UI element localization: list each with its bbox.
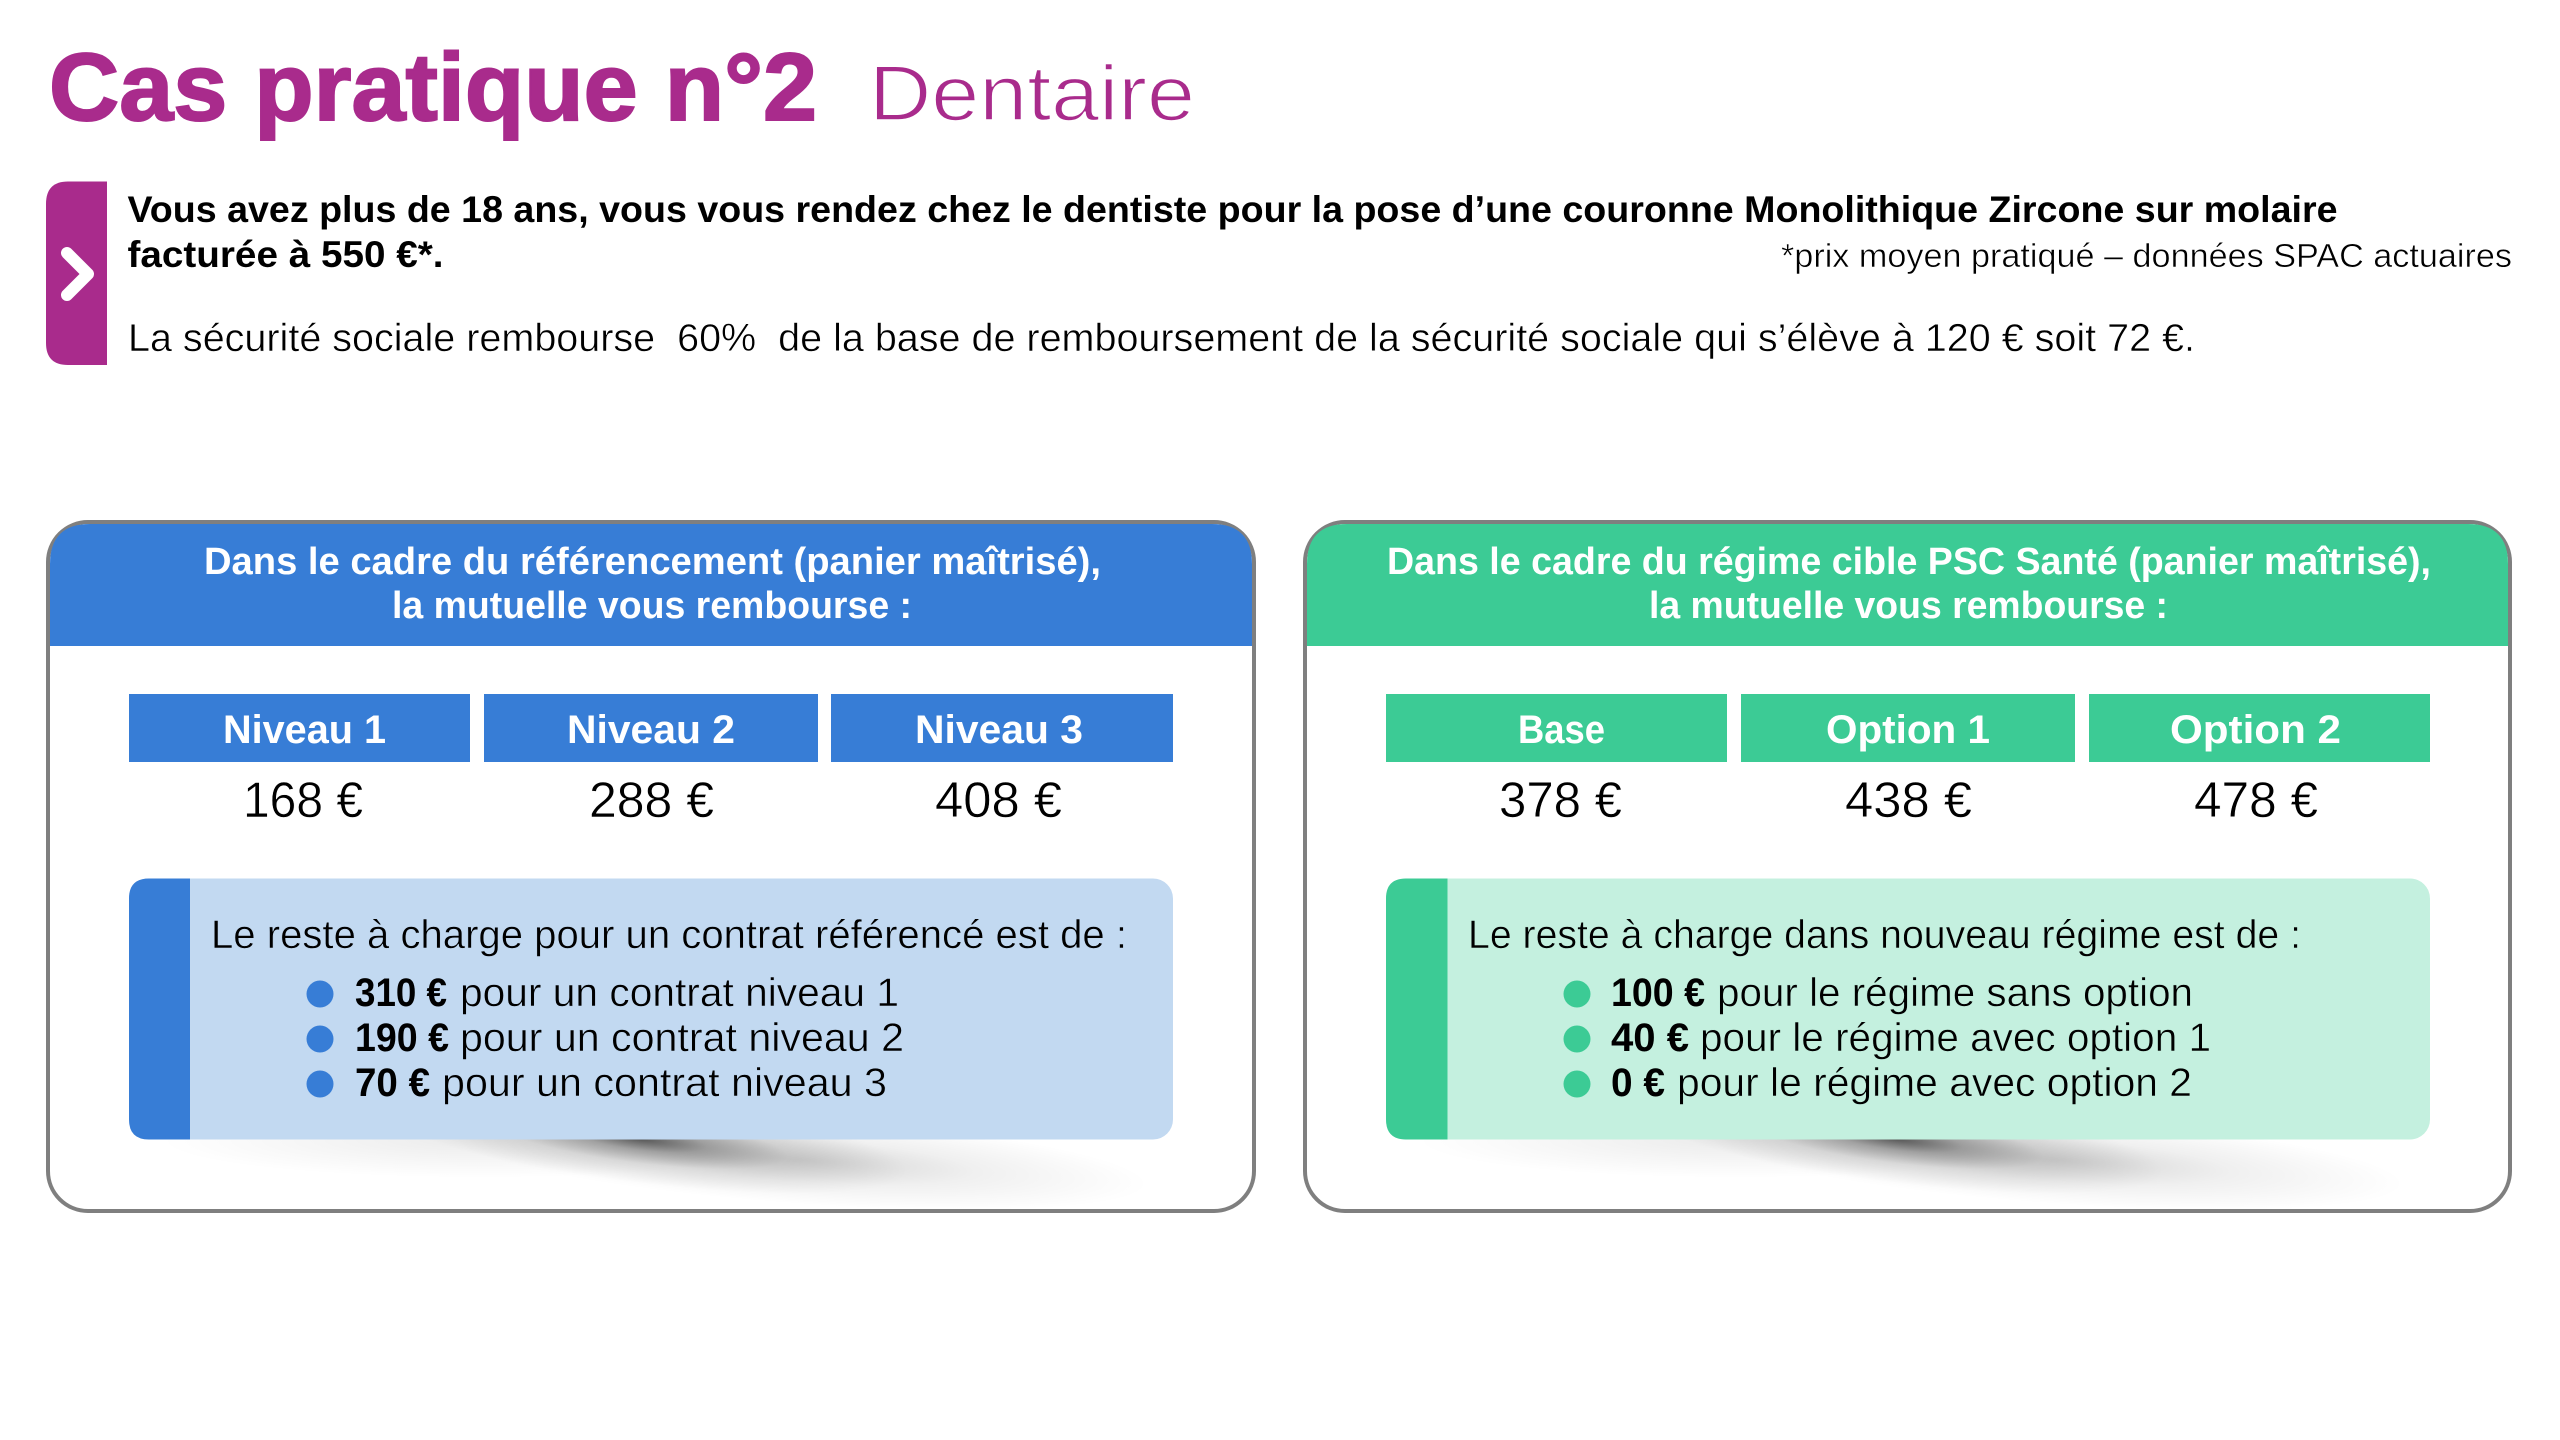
panel header: la mutuelle vous rembourse : <box>1649 585 2168 627</box>
callout: reste à charge <box>129 878 1173 1140</box>
column: Option 2: 478 € <box>2194 772 2318 828</box>
panel header <box>50 524 1252 646</box>
column: Niveau 1: 168 € <box>243 772 363 828</box>
title: Cas pratique n°2 <box>49 34 817 141</box>
bullet: sans option: pour le régime sans option <box>1717 971 2193 1015</box>
title: Dentaire <box>869 49 1195 137</box>
bullet: niveau 3: 70 € <box>355 1061 430 1105</box>
panel header <box>1307 524 2508 646</box>
text: scenario bold: facturée à 550 €*. <box>128 234 444 275</box>
column: Option 1: Option 1 <box>1826 708 1990 752</box>
column: Option 1 <box>1741 694 2075 828</box>
bullet: sans option: 100 € <box>1611 971 1705 1015</box>
bullet: option 2: pour le régime avec option 2 <box>1677 1061 2192 1105</box>
shadow under callout <box>1550 1140 2308 1196</box>
column: Niveau 1: Niveau 1 <box>223 708 386 752</box>
column: Niveau 1 <box>129 694 470 828</box>
panel: scenario intro <box>46 182 2512 365</box>
footnote: *prix moyen pratiqué – données SPAC actuaires <box>1781 237 2512 274</box>
bullet: option 1: 40 € <box>1611 1016 1689 1060</box>
column: Niveau 2 <box>484 694 818 828</box>
bullet: niveau 2: 190 € <box>355 1016 449 1060</box>
column: Option 2: Option 2 <box>2170 708 2341 752</box>
panel: référencement <box>48 522 1254 1228</box>
column: Option 2 <box>2089 694 2430 828</box>
bullet: option 1: pour le régime avec option 1 <box>1700 1016 2211 1060</box>
panel header: la mutuelle vous rembourse : <box>392 585 912 627</box>
panel: régime cible PSC <box>1305 522 2510 1228</box>
panel header: Dans le cadre du régime cible PSC Santé (panier maîtrisé), <box>1387 541 2431 583</box>
column: Niveau 3 <box>831 694 1173 828</box>
bullet: niveau 3: pour un contrat niveau 3 <box>442 1061 887 1105</box>
column: Base <box>1386 694 1727 828</box>
title <box>49 34 1195 141</box>
column: Niveau 3: 408 € <box>935 772 1062 828</box>
callout: reste à charge: Le reste à charge dans nouveau régime est de : <box>1468 913 2301 957</box>
callout: reste à charge <box>1386 878 2430 1140</box>
bullet: niveau 2: pour un contrat niveau 2 <box>460 1016 904 1060</box>
text: scenario bold <box>128 189 2338 275</box>
column: Niveau 2: Niveau 2 <box>567 708 735 752</box>
panel header: Dans le cadre du référencement (panier maîtrisé), <box>204 541 1101 583</box>
bullet: option 2: 0 € <box>1611 1061 1665 1105</box>
callout: reste à charge: Le reste à charge pour un contrat référencé est de : <box>211 913 1127 957</box>
shadow under callout <box>294 1140 1052 1196</box>
bullet: niveau 1: pour un contrat niveau 1 <box>460 971 899 1015</box>
bullet: niveau 1: 310 € <box>355 971 447 1015</box>
icon: chevron tab <box>46 182 107 365</box>
column: Base: 378 € <box>1499 772 1622 828</box>
column: Niveau 2: 288 € <box>589 772 714 828</box>
column: Option 1: 438 € <box>1845 772 1972 828</box>
text: social security: La sécurité sociale rembourse 60% de la base de remboursement de la sécurité sociale qui s’élève à 120 € soit 72 €. <box>128 317 2195 360</box>
column: Base: Base <box>1518 708 1605 752</box>
text: scenario bold: Vous avez plus de 18 ans, vous vous rendez chez le dentiste pour la pose d’une couronne Monolithique Zircone sur molaire <box>128 189 2338 230</box>
column: Niveau 3: Niveau 3 <box>915 708 1083 752</box>
